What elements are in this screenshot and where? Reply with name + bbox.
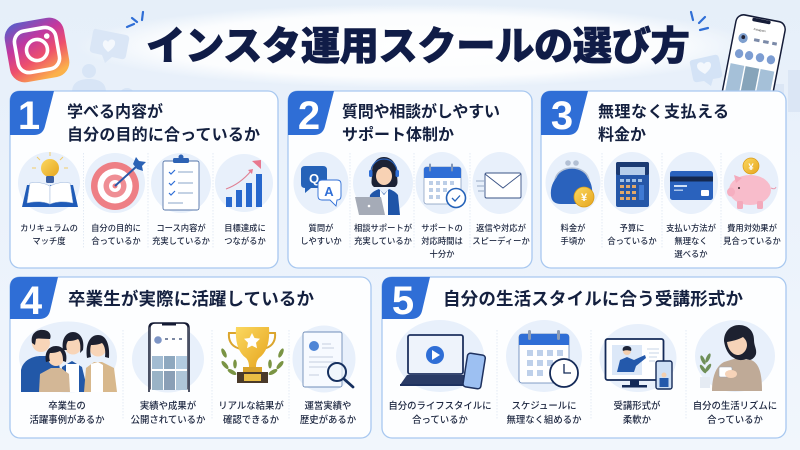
icon: purse: ¥	[581, 192, 588, 204]
heading 1	[67, 102, 260, 144]
caption 1-4: 目標達成に	[224, 223, 266, 233]
caption 2-4: 返信や対応が	[476, 223, 527, 233]
icon: piggy bank: ¥	[748, 162, 754, 173]
icon: instagram logo	[2, 15, 72, 85]
decoration: heart bubble right	[690, 55, 722, 86]
caption 5-3: 受講形式が	[614, 400, 661, 411]
title: インスタ運用スクールの選び方	[146, 25, 690, 69]
caption 1-2	[91, 223, 141, 246]
caption 4-2: 公開されているか	[131, 414, 206, 425]
caption 5-2: 無理なく組めるか	[506, 414, 582, 425]
caption 2-1	[300, 223, 342, 246]
decoration: bars right	[772, 70, 800, 112]
caption 5-1	[388, 400, 492, 425]
caption 4-1	[29, 400, 105, 425]
caption 5-2	[506, 400, 582, 425]
caption 1-1: マッチ度	[32, 236, 66, 246]
caption 2-1: しやすいか	[300, 236, 342, 246]
icon: piggy bank	[724, 152, 778, 214]
decoration: heart bubble left	[90, 29, 129, 63]
caption 1-1: カリキュラムの	[20, 223, 78, 233]
caption 5-2: スケジュールに	[512, 400, 576, 411]
icon: growth chart	[215, 154, 273, 212]
icon: phone top right	[716, 14, 787, 133]
icon: woman with cup	[695, 320, 775, 392]
icon: monitor and online lesson	[600, 324, 676, 392]
icon: support staff	[353, 152, 413, 215]
caption 2-3	[421, 223, 463, 259]
caption 4-3	[218, 400, 284, 425]
panel 2: support	[288, 91, 532, 268]
title glow	[75, 4, 755, 88]
caption 1-3: 充実しているか	[152, 236, 211, 246]
badge 4: 4	[20, 279, 43, 323]
caption 4-2	[131, 400, 206, 425]
heading 3	[598, 102, 729, 144]
heading 3: 無理なく支払える	[598, 102, 729, 121]
caption 3-1	[561, 223, 586, 246]
caption 1-2: 合っているか	[91, 236, 141, 246]
caption 2-4	[472, 223, 530, 246]
caption 2-3: サポートの	[421, 223, 463, 233]
caption 5-4: 合っているか	[707, 414, 764, 425]
heading 2	[342, 102, 500, 144]
caption 1-2: 自分の目的に	[91, 223, 141, 233]
badge 5: 5	[392, 279, 414, 323]
caption 3-1: 手頃か	[561, 236, 586, 246]
panel 4: graduates	[10, 277, 371, 438]
decoration: title sparks left	[127, 12, 143, 27]
badge 4	[10, 277, 58, 323]
panel 3: price	[541, 91, 786, 268]
caption 3-4	[723, 223, 782, 246]
icon: calendar and clock	[506, 320, 582, 392]
caption 2-1: 質問が	[309, 223, 334, 233]
caption 3-4: 費用対効果が	[727, 223, 778, 233]
caption 2-2: 充実しているか	[354, 236, 413, 246]
icon: calendar check	[416, 152, 468, 214]
heading 4: 卒業生が実際に活躍しているか	[68, 289, 314, 309]
icon: target	[85, 153, 146, 213]
caption 5-4	[693, 400, 777, 425]
icon: checklist	[151, 153, 211, 213]
caption 4-4: 運営実績や	[305, 400, 351, 411]
badge 1: 1	[18, 94, 40, 138]
panel 1: curriculum	[10, 91, 278, 268]
caption 4-4	[300, 400, 357, 425]
caption 3-2: 予算に	[620, 223, 644, 233]
icon: phone top right: Instagram	[753, 27, 767, 33]
caption 4-1: 活躍事例があるか	[29, 414, 105, 425]
icon: laptop and phone	[396, 320, 486, 392]
caption 2-3: 対応時間は	[421, 236, 463, 246]
icon: phone with results	[132, 322, 204, 392]
badge 3	[541, 91, 588, 138]
caption 5-3: 柔軟か	[623, 414, 652, 425]
icon: Q and A bubbles: Q	[309, 171, 319, 186]
caption 4-3: 確認できるか	[223, 414, 280, 425]
caption 3-1: 料金が	[561, 223, 586, 233]
badge 1	[10, 91, 54, 138]
caption 3-4: 見合っているか	[723, 236, 782, 246]
badge 3: 3	[551, 94, 573, 138]
icon: purse	[546, 152, 600, 214]
icon: document and magnifier	[292, 326, 356, 392]
caption 5-4: 自分の生活リズムに	[693, 400, 777, 411]
caption 1-3: コース内容が	[156, 223, 206, 233]
caption 3-3	[666, 223, 717, 259]
caption 5-1: 自分のライフスタイルに	[388, 400, 492, 411]
icon: credit card	[664, 152, 718, 214]
icon: Q and A bubbles: A	[324, 184, 334, 199]
caption 4-2: 実績や成果が	[140, 400, 197, 411]
caption 5-3	[614, 400, 661, 425]
heading 2: サポート体制か	[342, 126, 454, 144]
caption 1-4	[224, 223, 266, 246]
caption 5-1: 合っているか	[412, 414, 469, 425]
panel 5: study format	[382, 277, 786, 438]
caption 1-4: つながるか	[224, 236, 266, 246]
caption 2-3: 十分か	[430, 249, 455, 259]
caption 1-3	[152, 223, 211, 246]
caption 4-3: リアルな結果が	[218, 400, 284, 411]
decoration: title sparks right	[691, 12, 708, 30]
badge 2: 2	[298, 94, 320, 138]
caption 3-2	[607, 223, 657, 246]
heading 5: 自分の生活スタイルに合う受講形式か	[443, 289, 744, 309]
heading 1: 自分の目的に合っているか	[67, 125, 260, 144]
heading 3: 料金か	[598, 125, 646, 144]
icon: trophy with laurel	[220, 327, 285, 383]
caption 3-3: 無理なく	[674, 236, 708, 246]
caption 1-1	[20, 223, 78, 246]
caption 3-3: 支払い方法が	[666, 223, 717, 233]
badge 5	[382, 277, 430, 323]
caption 2-2: 相談サポートが	[354, 223, 413, 233]
caption 2-2	[354, 223, 413, 246]
icon: calculator	[604, 152, 660, 214]
caption 3-3: 選べるか	[674, 249, 708, 259]
caption 4-1: 卒業生の	[48, 400, 86, 411]
caption 2-4: スピーディーか	[472, 236, 530, 246]
badge 2	[288, 91, 334, 138]
icon: graduates group	[19, 322, 117, 392]
decoration: people silhouette	[72, 64, 135, 104]
icon: envelope	[472, 152, 528, 214]
heading 1: 学べる内容が	[67, 102, 163, 121]
caption 3-2: 合っているか	[607, 236, 657, 246]
icon: book and bulb	[18, 152, 80, 214]
caption 4-4: 歴史があるか	[300, 414, 357, 425]
icon: Q and A bubbles	[294, 152, 348, 214]
heading 2: 質問や相談がしやすい	[342, 102, 500, 121]
